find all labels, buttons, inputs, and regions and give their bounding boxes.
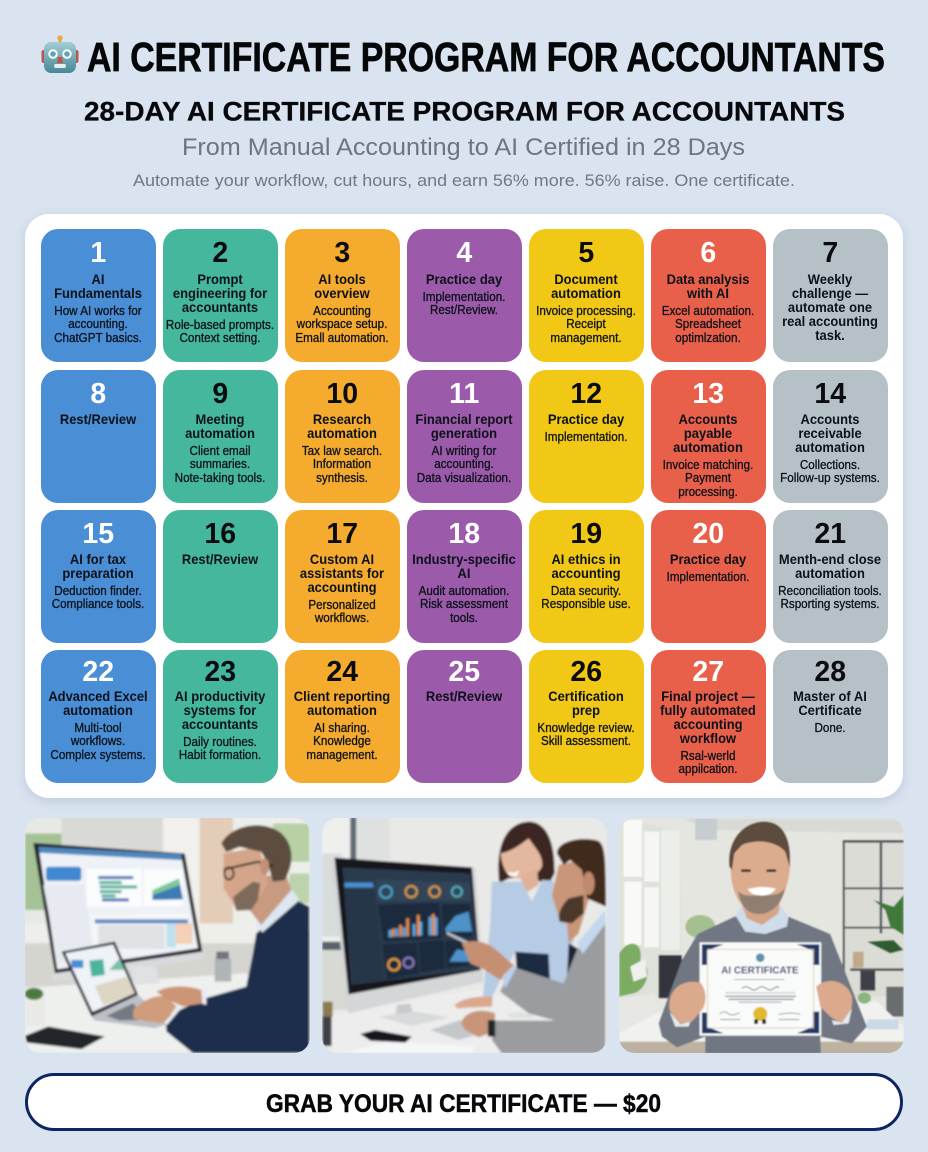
- day 8: [41, 370, 156, 502]
- day 6: 6: [700, 236, 716, 268]
- day 11: [407, 370, 522, 502]
- day 5: Invoice processing.: [536, 304, 636, 318]
- day 10: Information: [313, 457, 371, 471]
- day 16: 16: [204, 518, 236, 550]
- day 11: 11: [449, 378, 479, 410]
- day 11: AI writing for: [432, 444, 497, 458]
- day 1: accounting.: [68, 317, 128, 331]
- day 9: 9: [212, 378, 228, 410]
- day 27: [651, 650, 766, 782]
- day 17: Personalized: [309, 598, 376, 612]
- day 28: [773, 650, 888, 782]
- day 4: [407, 229, 522, 362]
- day 20: [651, 510, 766, 642]
- day 19: AI ethics in: [552, 551, 621, 567]
- day 13: automation: [673, 439, 743, 455]
- day 14: Collections.: [800, 458, 860, 472]
- day 4: 4: [456, 236, 472, 268]
- day 21: 21: [814, 518, 846, 550]
- photo: smiling man holding AI certificate: [619, 818, 904, 1053]
- day 7: task.: [815, 327, 845, 343]
- day 18: AI: [458, 565, 471, 581]
- day 8: 8: [90, 378, 106, 410]
- day 13: Invoice matching.: [663, 458, 754, 472]
- day 24: Client reporting: [294, 688, 390, 704]
- day 9: Note-taking tools.: [175, 470, 266, 484]
- day 5: automation: [551, 285, 621, 301]
- day 7: 7: [822, 236, 838, 268]
- subtitle: 28-DAY AI CERTIFICATE PROGRAM FOR ACCOUNTANTS: [84, 96, 845, 126]
- day 6: Spreadsheet: [675, 317, 741, 331]
- day 13: Payment: [685, 471, 731, 485]
- day 17: 17: [326, 518, 358, 550]
- day 2: [163, 229, 278, 362]
- day 1: [41, 229, 156, 362]
- day 9: Meeting: [196, 411, 245, 427]
- day 5: [529, 229, 644, 362]
- day 11: Financial report: [416, 411, 513, 427]
- day 24: 24: [326, 656, 358, 688]
- day 7: Weekly: [808, 271, 852, 287]
- day 26: prep: [572, 702, 600, 718]
- day 13: processing.: [678, 484, 738, 498]
- day 17: workflows.: [315, 611, 369, 625]
- day 18: [407, 510, 522, 642]
- day 6: Excel automation.: [662, 304, 755, 318]
- day 11: accounting.: [434, 457, 494, 471]
- day 10: Tax law search.: [302, 444, 382, 458]
- day 3: 3: [334, 236, 350, 268]
- photo: smiling man holding AI certificate: AI CERTIFICATE: [721, 965, 799, 976]
- day 13: 13: [692, 378, 724, 410]
- day 18: 18: [448, 518, 480, 550]
- day 14: [773, 370, 888, 502]
- day 19: Data security.: [551, 584, 621, 598]
- day 27: accounting: [674, 716, 743, 732]
- day 13: payable: [684, 425, 732, 441]
- day 18: Risk assessment: [420, 597, 508, 611]
- calendar grid: [41, 229, 888, 783]
- day 24: AI sharing.: [314, 720, 370, 734]
- day 3: [285, 229, 400, 362]
- day 19: Responsible use.: [542, 597, 631, 611]
- day 22: 22: [82, 656, 114, 688]
- day 2: Role-based prompts.: [166, 318, 274, 332]
- tagline: From Manual Accounting to AI Certified in 28 Days: [182, 134, 745, 161]
- day 20: Practice day: [670, 551, 746, 567]
- day 28: Master of AI: [793, 688, 867, 704]
- day 1: 1: [90, 236, 106, 268]
- day 24: management.: [307, 748, 378, 762]
- day 23: accountants: [182, 716, 258, 732]
- day 13: Accounts: [679, 411, 738, 427]
- day 14: receivable: [799, 425, 862, 441]
- day 25: 25: [448, 656, 480, 688]
- day 21: automation: [795, 565, 865, 581]
- icon: robot: [42, 35, 78, 73]
- day 27: fully automated: [660, 702, 756, 718]
- day 10: synthesis.: [316, 470, 368, 484]
- day 12: [529, 370, 644, 502]
- day 27: Final project —: [661, 688, 755, 704]
- day 22: Advanced Excel: [49, 688, 148, 704]
- day 24: Knowledge: [313, 734, 371, 748]
- day 10: automation: [307, 425, 377, 441]
- day 21: [773, 510, 888, 642]
- day 24: automation: [307, 702, 377, 718]
- day 11: Data visualization.: [417, 470, 512, 484]
- day 1: How AI works for: [55, 304, 142, 318]
- day 15: [41, 510, 156, 642]
- day 1: ChatGPT basics.: [54, 330, 142, 344]
- day 26: 26: [570, 656, 602, 688]
- day 24: [285, 650, 400, 782]
- day 10: Research: [313, 411, 371, 427]
- day 25: Rest/Review: [426, 688, 502, 704]
- day 2: Context setting.: [180, 331, 261, 345]
- day 2: 2: [212, 236, 228, 268]
- day 22: automation: [63, 702, 133, 718]
- day 6: optimlzation.: [676, 330, 741, 344]
- panel: 28-day calendar: [25, 214, 903, 798]
- day 20: Implementation.: [667, 570, 750, 584]
- day 23: AI productivity: [175, 688, 266, 704]
- day 17: accounting: [308, 579, 377, 595]
- day 3: Emall automation.: [296, 330, 389, 344]
- day 18: Audit automation.: [419, 584, 510, 598]
- day 5: Receipt: [566, 317, 606, 331]
- day 11: generation: [431, 425, 497, 441]
- day 17: Custom AI: [310, 551, 374, 567]
- day 28: Certificate: [799, 702, 862, 718]
- day 10: [285, 370, 400, 502]
- day 10: 10: [326, 378, 358, 410]
- day 2: engineering for: [173, 285, 267, 301]
- day 15: AI for tax: [70, 551, 126, 567]
- day 3: workspace setup.: [297, 317, 388, 331]
- day 7: automate one: [788, 299, 872, 315]
- day 9: automation: [185, 425, 255, 441]
- day 12: Implementation.: [545, 430, 628, 444]
- day 23: 23: [204, 656, 236, 688]
- day 23: [163, 650, 278, 782]
- day 1: AI: [92, 271, 105, 287]
- day 21: Rsporting systems.: [781, 597, 880, 611]
- day 15: Deduction finder.: [55, 584, 142, 598]
- day 9: [163, 370, 278, 502]
- day 21: Menth-end close: [779, 551, 881, 567]
- day 6: with AI: [687, 285, 729, 301]
- day 27: Rsal-werld: [681, 748, 736, 762]
- day 14: 14: [814, 378, 846, 410]
- button label: GRAB YOUR AI CERTIFICATE — $20: [266, 1090, 661, 1118]
- day 7: real accounting: [782, 313, 878, 329]
- day 2: accountants: [182, 299, 258, 315]
- day 25: [407, 650, 522, 782]
- day 23: Daily routines.: [183, 734, 257, 748]
- day 16: [163, 510, 278, 642]
- day 26: Skill assessment.: [541, 734, 631, 748]
- call to action button: [25, 1073, 903, 1131]
- day 12: 12: [570, 378, 602, 410]
- day 1: Fundamentals: [54, 285, 142, 301]
- day 27: 27: [692, 656, 724, 688]
- day 15: 15: [82, 518, 114, 550]
- day 19: 19: [570, 518, 602, 550]
- day 9: summaries.: [190, 457, 250, 471]
- day 4: Implementation.: [423, 290, 506, 304]
- photo: two colleagues reviewing a dashboard: [322, 818, 606, 1053]
- photo: accountant working at monitor and laptop: [25, 818, 310, 1053]
- supporting line: Automate your workflow, cut hours, and earn 56% more. 56% raise. One certificate.: [133, 171, 795, 190]
- day 18: Industry-specific: [412, 551, 516, 567]
- day 27: workflow: [680, 730, 736, 746]
- day 8: Rest/Review: [60, 411, 136, 427]
- day 2: Prompt: [198, 271, 243, 287]
- day 6: Data analysis: [667, 271, 750, 287]
- day 26: [529, 650, 644, 782]
- day 15: Compliance tools.: [52, 597, 145, 611]
- day 22: [41, 650, 156, 782]
- day 3: AI tools: [319, 271, 366, 287]
- page header: [42, 34, 885, 190]
- day 5: 5: [578, 236, 594, 268]
- day 5: Document: [555, 271, 618, 287]
- day 7: [773, 229, 888, 362]
- day 15: preparation: [63, 565, 134, 581]
- day 20: 20: [692, 518, 724, 550]
- day 9: Client email: [190, 444, 251, 458]
- day 22: Complex systems.: [51, 748, 146, 762]
- day 23: systems for: [184, 702, 257, 718]
- day 19: [529, 510, 644, 642]
- day 18: tools.: [450, 610, 478, 624]
- day 3: Accounting: [313, 304, 371, 318]
- day 17: [285, 510, 400, 642]
- day 14: Accounts: [801, 411, 860, 427]
- day 4: Practice day: [426, 271, 502, 287]
- day 14: automation: [795, 439, 865, 455]
- day 22: workflows.: [71, 734, 125, 748]
- day 28: 28: [814, 656, 846, 688]
- day 17: assistants for: [300, 565, 384, 581]
- day 23: Habit formation.: [179, 748, 261, 762]
- day 19: accounting: [552, 565, 621, 581]
- day 22: Multi-tool: [75, 720, 122, 734]
- day 26: Knowledge review.: [538, 720, 635, 734]
- day 5: management.: [551, 330, 622, 344]
- day 21: Reconciliation tools.: [778, 584, 882, 598]
- day 16: Rest/Review: [182, 551, 258, 567]
- day 7: challenge —: [792, 285, 868, 301]
- day 14: Follow-up systems.: [780, 471, 880, 485]
- day 6: [651, 229, 766, 362]
- day 4: Rest/Review.: [430, 303, 498, 317]
- day 13: [651, 370, 766, 502]
- day 27: appilcation.: [679, 762, 738, 776]
- day 12: Practice day: [548, 411, 624, 427]
- day 28: Done.: [815, 720, 846, 734]
- day 3: overview: [315, 285, 370, 301]
- day 26: Certification: [548, 688, 624, 704]
